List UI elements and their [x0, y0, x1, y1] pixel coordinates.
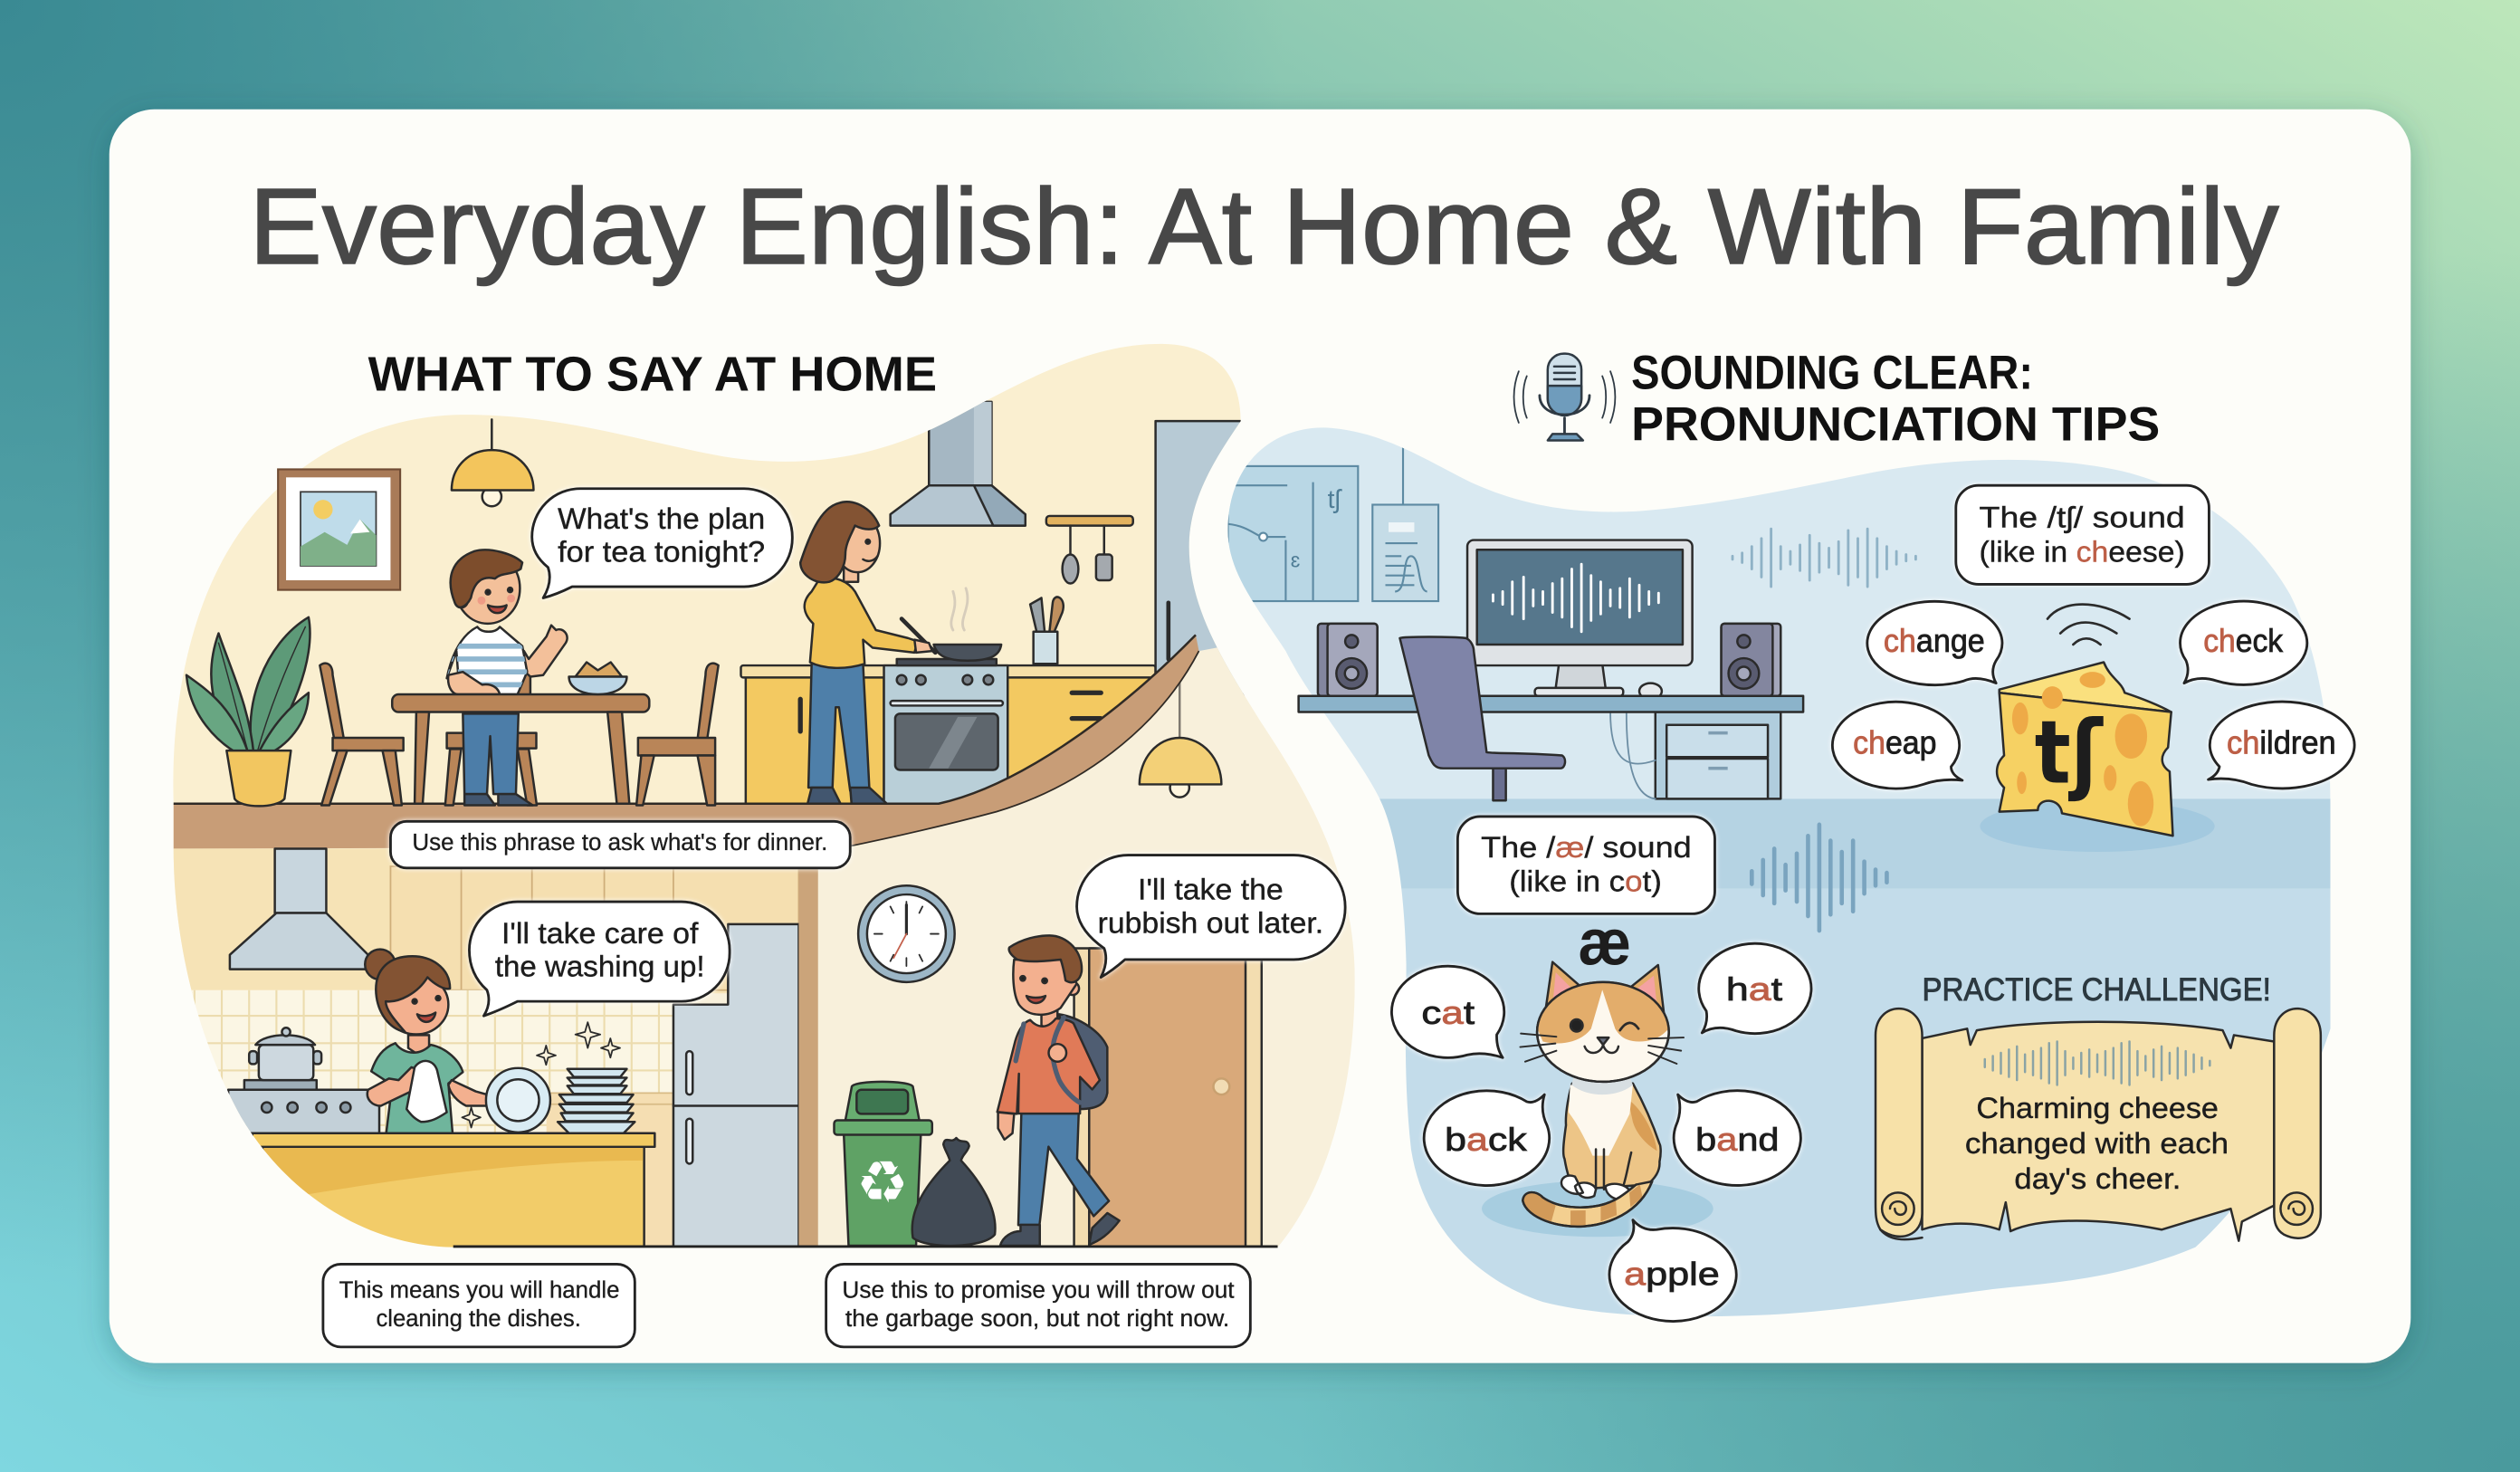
blueprint phonetic labels: tʃ [1328, 485, 1342, 514]
heading: what to say at home: WHAT TO SAY AT HOME [368, 347, 937, 401]
blueprint phonetic labels [1291, 485, 1342, 572]
lower fridge [673, 924, 798, 1247]
blueprint phonetic labels: ɛ [1291, 549, 1300, 572]
caption: ask what's for dinner [390, 821, 850, 868]
word bubble: change: change [1884, 622, 1985, 659]
rubbish bag [912, 1138, 995, 1246]
title: Everyday English: At Home & With Family [249, 167, 2279, 287]
word bubble: back [1424, 1091, 1550, 1186]
jar of utensils [1030, 597, 1064, 664]
fridge upper [1156, 421, 1252, 694]
upper cabinets lower kitchen [390, 866, 798, 990]
pendant lamp lower [1140, 672, 1221, 798]
waveform behind ae bubble [1752, 825, 1886, 931]
heading: sounding clear: SOUNDING CLEAR: [1631, 347, 2033, 400]
lower counter [253, 1133, 654, 1249]
word bubble: cheap: cheap [1853, 724, 1936, 761]
heading: sounding clear: PRONUNCIATION TIPS [1631, 397, 2160, 451]
heading: sounding clear [1631, 347, 2160, 451]
callout: the ae sound: (like in c ot) [1509, 865, 1662, 898]
sound waveform [1732, 529, 1915, 587]
upper kitchen cabinets [741, 665, 1160, 806]
word bubble: band: band [1695, 1121, 1779, 1158]
cheese shadow [1980, 800, 2215, 852]
cat shadow [1482, 1180, 1713, 1237]
studio wall panels [1227, 437, 1438, 601]
floor line [453, 1246, 1278, 1247]
caption: throw out garbage [826, 1264, 1250, 1347]
word bubble: apple: apple [1624, 1256, 1720, 1293]
lower kitchen wall [174, 849, 727, 994]
speech bubble: rubbish: rubbish out later. [1098, 906, 1323, 940]
word bubble: check: check [2203, 622, 2284, 659]
plant [186, 617, 310, 806]
lower room wall [675, 648, 1354, 1247]
floor band [161, 635, 1199, 848]
callout: the tʃ sound [1956, 485, 2209, 584]
heading: practice challenge: PRACTICE CHALLENGE! [1923, 971, 2271, 1008]
woman washing up [365, 950, 487, 1133]
utensil rail [1046, 516, 1133, 584]
back counter [547, 1093, 675, 1249]
pendant lamp [452, 419, 533, 506]
speech bubble: plan for tea: What's the plan [558, 502, 765, 535]
dining chairs [320, 664, 719, 806]
panel: at home scenes [161, 330, 1446, 1347]
cheese with phoneme [1997, 663, 2172, 836]
speech bubble: washing up: the washing up! [495, 950, 705, 983]
panel: pronunciation tips [1206, 410, 2346, 1339]
caption: throw out garbage: the garbage soon, but not right now. [845, 1306, 1229, 1332]
table [392, 694, 649, 804]
desk with monitor and speakers [1299, 540, 1803, 800]
speech bubble: rubbish [1077, 855, 1345, 978]
scroll text: changed with each [1965, 1126, 2229, 1160]
word bubble: children: children [2227, 724, 2336, 761]
scroll waveform [1985, 1042, 2210, 1085]
ae phoneme: æ [1579, 907, 1631, 979]
callout: the ae sound: The / æ/ sound [1481, 830, 1692, 864]
word bubble: children [2209, 702, 2354, 789]
man with backpack [998, 935, 1120, 1246]
cheese phoneme: tʃ [2035, 703, 2104, 804]
upper and lower room illustration [173, 344, 1354, 1247]
speech bubble: washing up: I'll take care of [501, 916, 699, 950]
word bubble: cat [1391, 966, 1504, 1057]
door [1074, 949, 1262, 1247]
monitor waveform [1493, 564, 1658, 632]
speech bubble: rubbish: I'll take the [1138, 872, 1284, 905]
cat [1520, 962, 1684, 1227]
callout: the ae sound [1457, 817, 1714, 913]
sound arcs above cheese [2048, 605, 2130, 645]
white card [110, 110, 2410, 1363]
wall clock [858, 885, 955, 982]
wood column [798, 866, 818, 1247]
clean plates and sparkles [462, 1022, 635, 1133]
range hood [891, 402, 1026, 526]
tiled wall [192, 990, 673, 1132]
boy at table [444, 550, 568, 806]
speech bubble: washing up [469, 902, 730, 1016]
caption: cleaning the dishes: cleaning the dishes. [376, 1306, 581, 1332]
caption: ask what's for dinner: Use this phrase to ask what's for dinner. [412, 830, 827, 855]
speech bubble: plan for tea: for tea tonight? [558, 535, 765, 569]
scroll text: day's cheer. [2014, 1161, 2181, 1195]
woman cooking [800, 502, 932, 807]
word bubble: hat: hat [1726, 970, 1782, 1008]
icon: microphone [1514, 354, 1615, 440]
word bubble: change [1867, 601, 2002, 685]
speech bubble: plan for tea [532, 489, 792, 597]
caption: cleaning the dishes [323, 1264, 635, 1347]
pan with steam [902, 588, 1001, 661]
lower stove and pot [228, 1028, 379, 1133]
recycling symbol: ♻ [856, 1150, 908, 1217]
framed picture [278, 469, 400, 590]
recycling bin [834, 1082, 932, 1246]
caption: throw out garbage: Use this to promise you will throw out [842, 1278, 1235, 1304]
callout: the tʃ sound: (like in cheese) [1980, 535, 2185, 569]
word bubble: cat: cat [1421, 994, 1475, 1031]
bowl of food [569, 663, 626, 694]
word bubble: back: back [1445, 1121, 1528, 1158]
word bubble: check [2181, 601, 2307, 684]
practice scroll [1876, 1008, 2321, 1241]
word bubble: cheap [1832, 702, 1962, 789]
caption: cleaning the dishes: This means you will handle [339, 1278, 619, 1304]
word bubble: apple [1609, 1220, 1736, 1322]
stove and oven [884, 659, 1007, 807]
blue background blob [1206, 410, 2346, 1339]
lower hood [230, 848, 368, 970]
word bubble: band [1674, 1091, 1800, 1185]
scroll text: Charming cheese [1976, 1091, 2219, 1124]
word bubble: hat [1699, 943, 1811, 1034]
callout: the tʃ sound: The /tʃ/ sound [1980, 500, 2185, 533]
scroll text [1965, 1091, 2229, 1195]
